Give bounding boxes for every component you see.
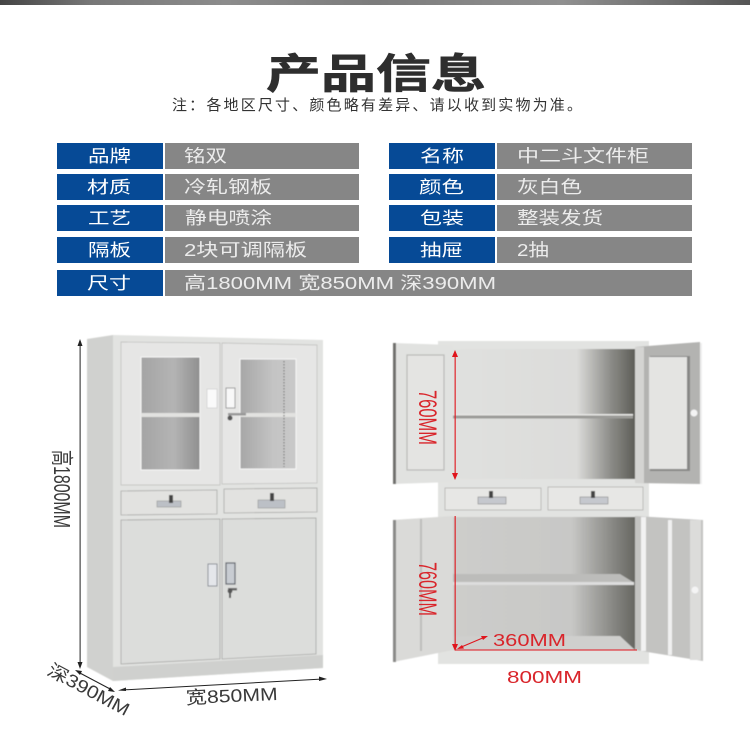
- row: material: 冷轧钢板: [184, 177, 272, 197]
- row: size: 高1800MM 宽850MM 深390MM: [184, 273, 496, 293]
- width label: 800MM: [507, 667, 582, 687]
- row: shelves: 2块可调隔板: [184, 240, 307, 260]
- cabinet plinth: [113, 655, 323, 681]
- row: colour: 颜色: [419, 178, 464, 197]
- row: drawers: 抽屉: [420, 241, 463, 260]
- row: name: [389, 143, 692, 169]
- row: process: 静电喷涂: [185, 208, 272, 228]
- row: name: 名称: [420, 147, 464, 166]
- upper left glass door: [121, 342, 220, 485]
- row: packaging: [389, 205, 692, 231]
- depth label: 360MM: [493, 630, 566, 650]
- lower left open door: [393, 516, 453, 662]
- note text: 注：各地区尺寸、颜色略有差异、请以收到实物为准。: [172, 97, 582, 114]
- depth arrow: [75, 670, 115, 692]
- row: process: [57, 205, 359, 231]
- height label: 高1800MM: [49, 450, 75, 528]
- lower compartment interior: [453, 517, 635, 650]
- cabinet front frame: [113, 335, 323, 681]
- middle drawers: [445, 487, 643, 510]
- upper compartment interior: [453, 349, 635, 479]
- lower right open door: [635, 516, 703, 661]
- row: colour: [389, 174, 692, 200]
- row: packaging: 包装: [420, 209, 464, 228]
- row: size: [57, 270, 692, 296]
- top decorative band: [0, 0, 750, 5]
- lower red height line: [452, 516, 458, 651]
- upper red height arrow: [452, 350, 458, 480]
- row: drawers: 2抽: [517, 240, 549, 260]
- row: material: [57, 174, 359, 200]
- row: colour: 灰白色: [517, 177, 582, 197]
- row: name: 中二斗文件柜: [517, 146, 649, 166]
- row: size: 尺寸: [87, 274, 131, 293]
- row: brand: [57, 143, 359, 169]
- row: material: 材质: [87, 178, 131, 197]
- lower height label: 760MM: [413, 562, 441, 616]
- specification table: [57, 143, 692, 296]
- width arrow: [118, 676, 327, 691]
- row: process: 工艺: [88, 209, 131, 228]
- drawers: [121, 488, 317, 515]
- upper right glass door: [222, 343, 317, 484]
- row: packaging: 整装发货: [517, 208, 603, 228]
- cabinet body frame: [438, 341, 649, 664]
- row: drawers: [389, 237, 692, 263]
- lower right door: [222, 518, 316, 659]
- row: shelves: 隔板: [88, 241, 131, 260]
- row: shelves: [57, 237, 359, 263]
- red width line: [455, 650, 637, 651]
- row: brand: 铭双: [184, 146, 227, 166]
- upper left open door: [393, 343, 453, 484]
- upper height label: 760MM: [413, 390, 441, 445]
- closed cabinet illustration: [87, 335, 323, 681]
- row: brand: 品牌: [88, 147, 131, 166]
- width label: 宽850MM: [185, 684, 278, 708]
- height arrow: [78, 339, 82, 669]
- open cabinet illustration: [393, 341, 703, 664]
- upper right open door: [635, 342, 702, 484]
- title: 产品信息: [266, 51, 486, 97]
- lower left door: [121, 519, 220, 664]
- cabinet side panel: [87, 335, 113, 681]
- depth label: 深390MM: [44, 660, 133, 720]
- red depth arrow: [457, 636, 488, 649]
